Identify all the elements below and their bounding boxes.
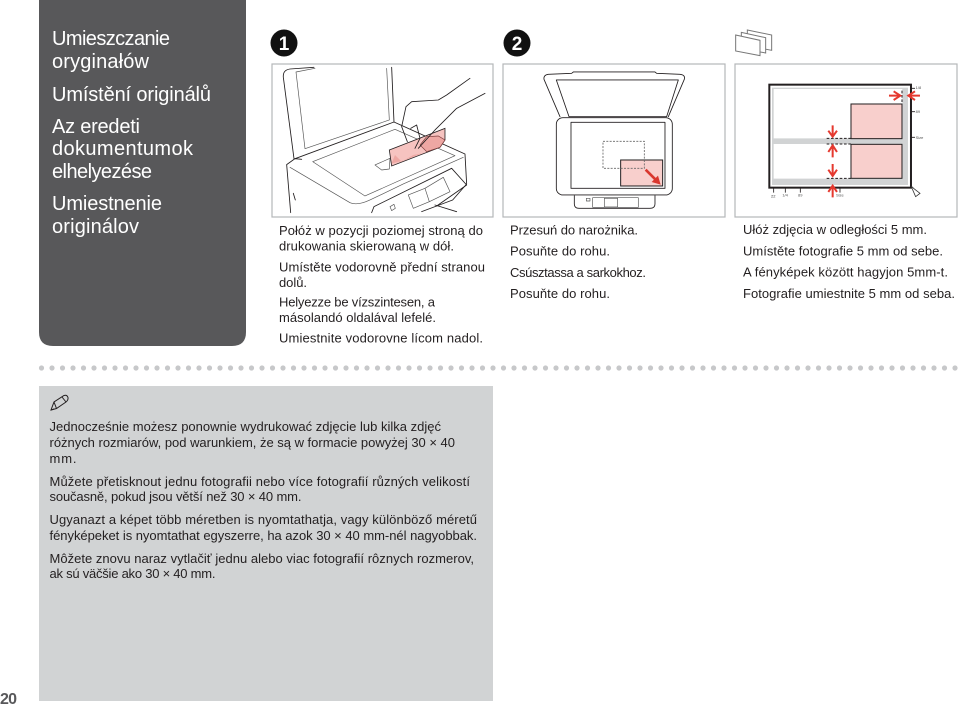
- step 2 badge: 2: [512, 34, 522, 55]
- multiple photos illustration: 5 mm spacing: Size: [916, 135, 924, 140]
- panel: section title sidebar: elhelyezése: [52, 161, 152, 183]
- icon: stacked photos: [736, 30, 772, 56]
- step 1 illustration: placing photo on scanner glass: [272, 64, 493, 217]
- panel: section title sidebar: Umieszczanie: [52, 28, 170, 50]
- icon: pencil: [51, 395, 68, 410]
- multiple photos illustration: 5 mm spacing: 89: [798, 192, 803, 197]
- multiple photos illustration: 5 mm spacing: [735, 64, 957, 217]
- note text: Jednocześnie możesz ponownie wydrukować zdjęcie lub kilka zdjęć: [50, 419, 442, 434]
- step 2 text: Csúsztassa a sarkokhoz.: [510, 265, 646, 280]
- step 3 text: Umístěte fotografie 5 mm od sebe.: [743, 244, 943, 258]
- step 1 text: dolů.: [279, 275, 307, 290]
- step 1 badge: 1: [279, 34, 290, 55]
- note text: różnych rozmiarów, pod warunkiem, że są w formacie powyżej 30 × 40: [50, 435, 455, 450]
- step 2 text: [510, 222, 646, 301]
- step 2 text: Posuňte do rohu.: [510, 244, 610, 258]
- step 1 text: másolandó oldalával lefelé.: [279, 310, 436, 325]
- note text: [50, 419, 477, 581]
- step 2 illustration: slide photo to corner: [503, 64, 725, 217]
- step 2 badge: [504, 30, 530, 56]
- multiple photos illustration: 5 mm spacing: 1/4: [782, 192, 789, 197]
- panel: section title sidebar: [39, 0, 246, 346]
- panel: note box: [39, 386, 493, 701]
- dotted separator: [39, 365, 958, 371]
- panel: section title sidebar: oryginałów: [52, 51, 150, 73]
- note text: ak sú väčšie ako 30 × 40 mm.: [50, 566, 216, 581]
- multiple photos illustration: 5 mm spacing: 1/8: [916, 85, 922, 90]
- multiple photos illustration: 5 mm spacing: 22: [771, 194, 776, 199]
- step 1 text: [279, 223, 485, 346]
- multiple photos illustration: 5 mm spacing: 89: [916, 109, 921, 114]
- step 1 text: Umístěte vodorovně přední stranou: [279, 260, 485, 274]
- panel: section title sidebar: Az eredeti: [52, 116, 140, 138]
- panel: section title sidebar: dokumentumok: [52, 138, 194, 160]
- note text: fényképeket is nyomtathat egyszerre, ha azok 30 × 40 mm-nél nagyobbak.: [50, 528, 477, 543]
- note text: Ugyanazt a képet több méretben is nyomtathatja, vagy különböző méretű: [50, 512, 477, 527]
- step 3 text: [743, 222, 955, 301]
- panel: section title sidebar: Umístění originálů: [52, 84, 211, 106]
- multiple photos illustration: 5 mm spacing: Size: [836, 193, 845, 198]
- panel: section title sidebar: Umiestnenie: [52, 193, 162, 215]
- step 1 text: Umiestnite vodorovne lícom nadol.: [279, 330, 483, 346]
- step 2 text: Posuňte do rohu.: [510, 286, 610, 301]
- step 1 text: Helyezze be vízszintesen, a: [279, 294, 436, 310]
- step 1 text: Połóż w pozycji poziomej stroną do: [279, 223, 483, 238]
- step 3 text: Fotografie umiestnite 5 mm od seba.: [743, 286, 955, 301]
- step 2 text: Przesuń do narożnika.: [510, 222, 638, 238]
- note text: Môžete znovu naraz vytlačiť jednu alebo viac fotografií rôznych rozmerov,: [50, 551, 474, 566]
- step 3 text: A fényképek között hagyjon 5mm-t.: [743, 264, 948, 280]
- note text: Můžete přetisknout jednu fotografii nebo více fotografií různých velikostí: [50, 474, 470, 489]
- panel: section title sidebar: originálov: [52, 216, 139, 238]
- step 1 badge: [270, 30, 298, 56]
- note text: současně, pokud jsou větší než 30 × 40 mm.: [50, 489, 302, 504]
- step 3 text: Ułóż zdjęcia w odległości 5 mm.: [743, 222, 927, 237]
- step 1 text: drukowania skierowaną w dół.: [279, 238, 454, 254]
- note text: mm.: [50, 451, 76, 466]
